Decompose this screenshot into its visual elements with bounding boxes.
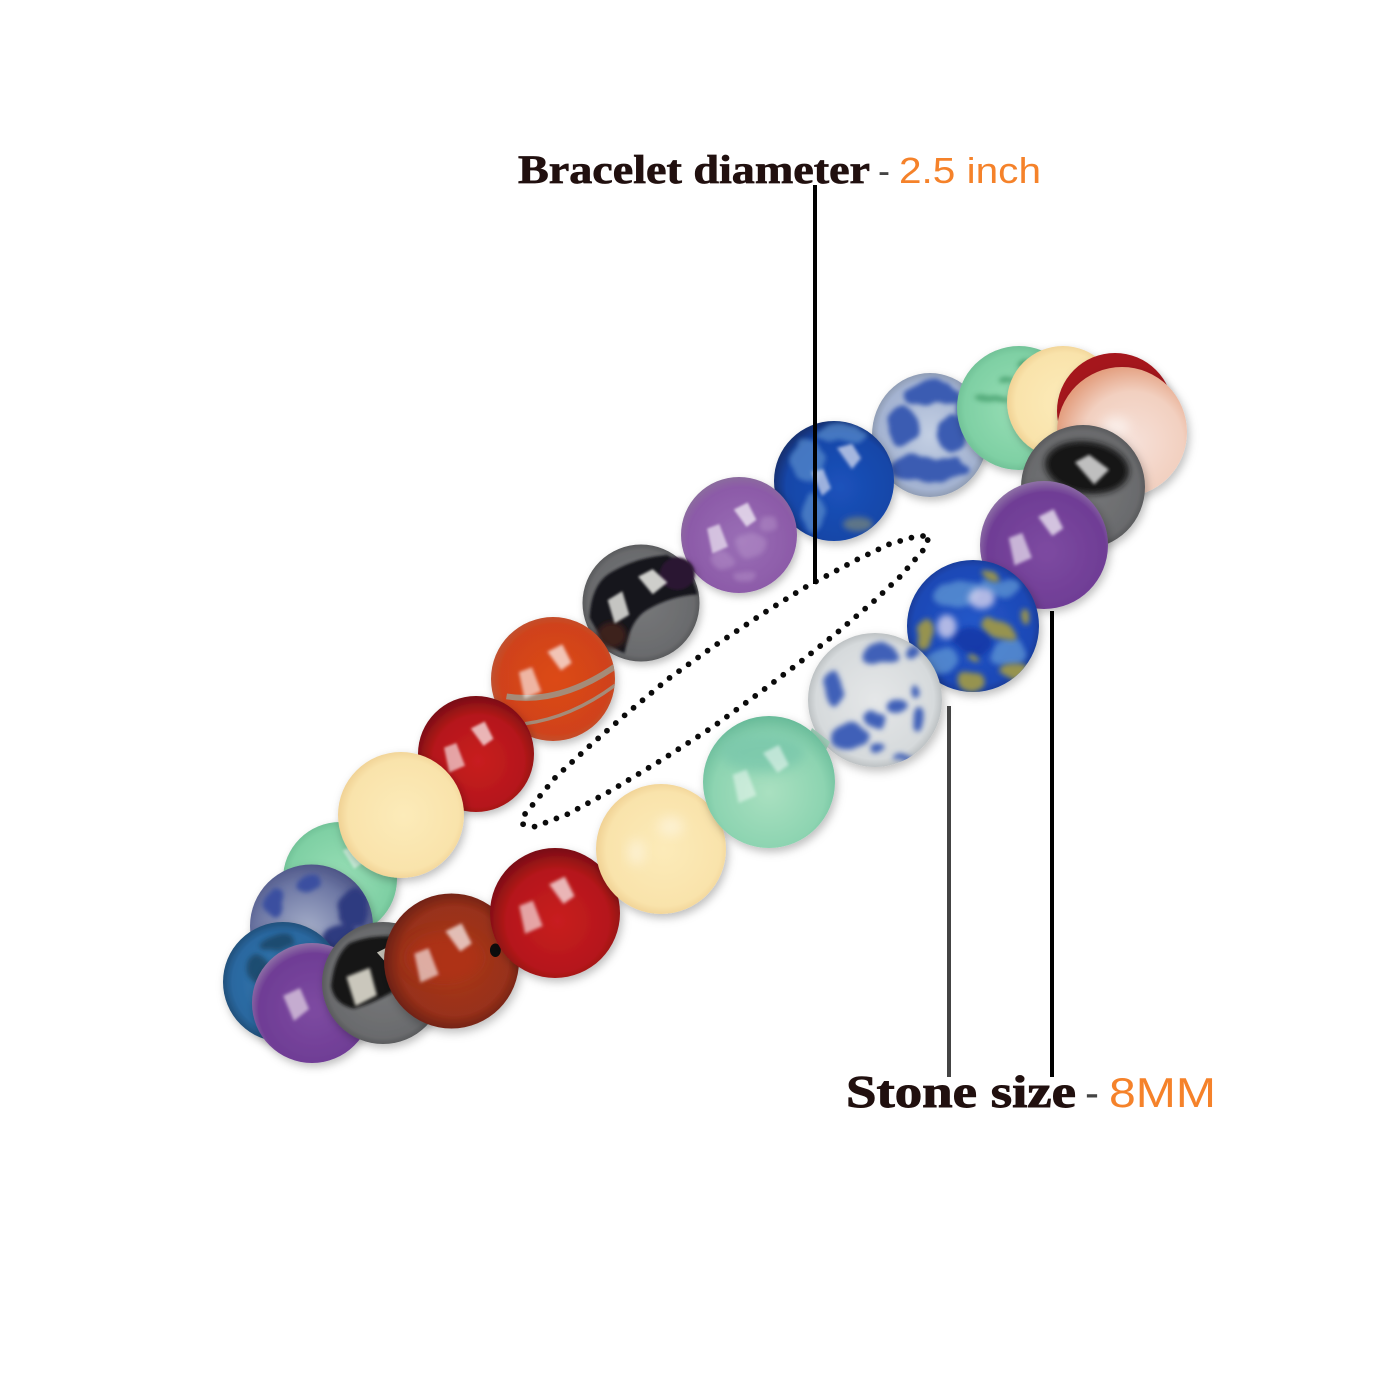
bead: orange jasper with band bbox=[491, 617, 615, 741]
dotted inner diameter outline bbox=[522, 536, 928, 827]
bracelet bbox=[223, 346, 1187, 1063]
bead: red carnelian back right bbox=[1057, 353, 1173, 469]
label: bracelet diameter: Bracelet diameter bbox=[518, 147, 870, 192]
bead: peach quartz end bbox=[1057, 367, 1187, 497]
bead: sodalite back bbox=[872, 373, 988, 497]
bead: dark lapis left bbox=[223, 922, 343, 1042]
bead: amethyst back bbox=[681, 477, 797, 593]
bead: red carnelian front bbox=[490, 848, 620, 978]
bead: amethyst left bbox=[252, 943, 372, 1063]
bead: sodalite left bbox=[248, 864, 378, 948]
bead: cord between green and sodalite bbox=[808, 728, 830, 750]
bead: yellow left bbox=[338, 752, 464, 878]
bead: sodalite front bbox=[808, 633, 942, 767]
label: stone size bbox=[846, 1066, 1216, 1117]
bead: green aventurine back bbox=[955, 345, 1044, 478]
bead: lapis front right bbox=[907, 560, 1039, 692]
label: bracelet diameter: - bbox=[878, 150, 890, 191]
leader line: bracelet diameter bbox=[813, 185, 817, 584]
bead: green aventurine front bbox=[703, 716, 835, 848]
leader line: stone size right bbox=[1050, 611, 1054, 1077]
leader line: stone size left bbox=[947, 706, 951, 1077]
label: bracelet diameter: 2.5 inch bbox=[899, 150, 1041, 191]
bead: amethyst right bbox=[980, 481, 1108, 609]
label: stone size: 8MM bbox=[1109, 1069, 1216, 1116]
label: bracelet diameter bbox=[518, 147, 1041, 192]
bead: yellow calcite back bbox=[1007, 346, 1119, 458]
bead: yellow calcite front bbox=[596, 784, 726, 914]
bead: lapis back bbox=[774, 421, 894, 541]
bead: green left bbox=[283, 822, 397, 936]
bead: red carnelian back left bbox=[418, 696, 534, 812]
bead: hematite right bbox=[1021, 425, 1145, 549]
label: stone size: Stone size bbox=[846, 1066, 1076, 1117]
label: stone size: - bbox=[1085, 1069, 1099, 1116]
bead: hematite left bbox=[322, 922, 444, 1044]
bead: hematite back bbox=[582, 544, 700, 662]
bead: red jasper front bbox=[384, 894, 519, 1028]
